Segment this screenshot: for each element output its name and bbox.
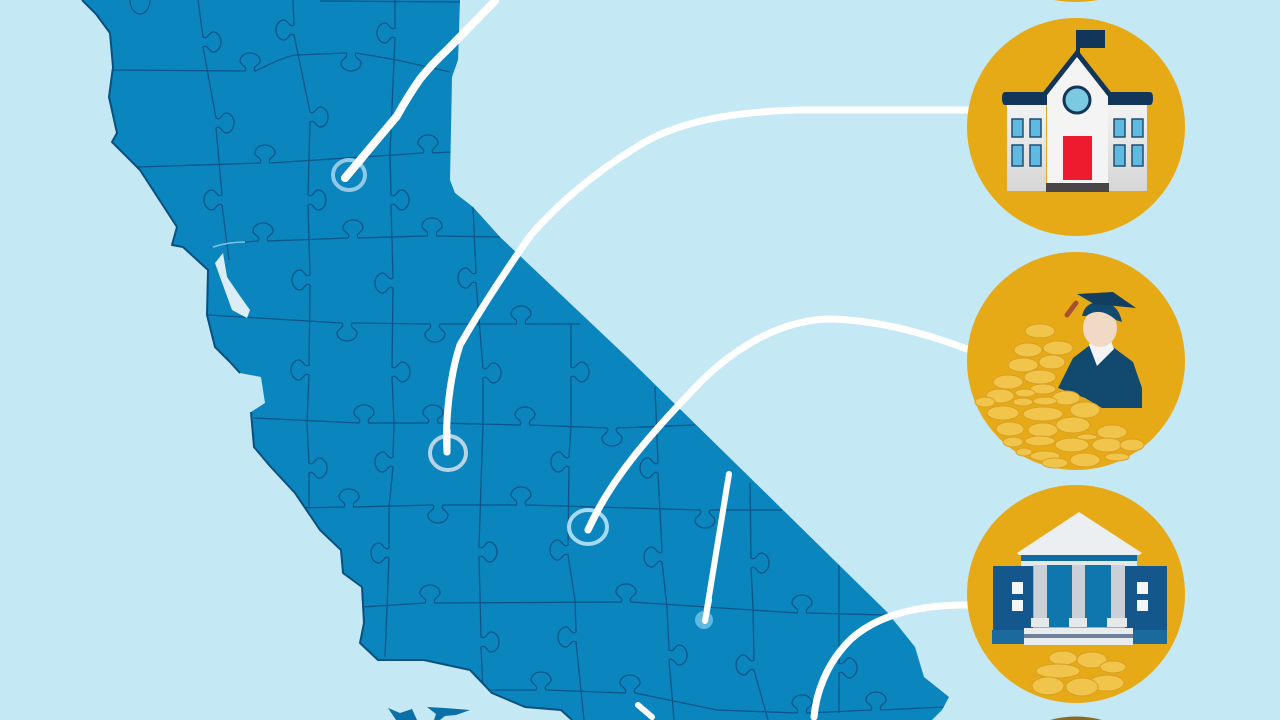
coin pile (975, 324, 1144, 468)
puzzle piece seams (112, 0, 945, 720)
badge (967, 18, 1185, 236)
map: California puzzle (82, 0, 949, 720)
door (1063, 136, 1092, 180)
clock (1064, 87, 1090, 113)
connector lines (345, 1, 968, 717)
wing roofs (1002, 92, 1153, 105)
islands (388, 707, 470, 720)
central gable (1047, 55, 1108, 192)
central wall (1046, 565, 1112, 627)
wings (1007, 105, 1147, 191)
icon: graduate with coins (967, 252, 1185, 470)
icon: bank with coins (967, 485, 1185, 703)
location ring 3 (569, 510, 607, 544)
badge (967, 252, 1185, 470)
flag (1076, 30, 1105, 54)
mortarboard (1077, 292, 1136, 308)
connector 2 (447, 110, 968, 452)
hair (1082, 302, 1122, 322)
icon: partial circle top (1054, 0, 1098, 2)
head (1083, 309, 1117, 347)
icon: school (967, 18, 1185, 236)
coastline outline (82, 0, 572, 720)
connector 5 (814, 605, 967, 717)
windows (1012, 119, 1143, 166)
tassel (1067, 303, 1076, 315)
gable roof (1044, 53, 1110, 95)
frieze (1021, 555, 1137, 561)
connector 4 (705, 474, 729, 621)
collar (1089, 338, 1114, 366)
side wings (993, 566, 1167, 630)
architrave (1021, 561, 1137, 566)
pediment (1017, 512, 1142, 555)
coins (1032, 651, 1126, 696)
location ring 1 (333, 160, 365, 190)
bay inlet highlight (213, 242, 245, 247)
location ring 2 (430, 436, 466, 470)
steps (1046, 183, 1109, 192)
stairs (1024, 628, 1133, 645)
connector 1 (345, 1, 495, 178)
location ring 4 (695, 611, 713, 629)
badge (967, 485, 1185, 703)
column bases (1031, 618, 1127, 627)
connector 6 (638, 705, 652, 717)
wing bases (992, 630, 1167, 644)
line tips redrawn over rings (345, 158, 709, 621)
map silhouette (82, 0, 949, 720)
icon: partial circle bottom (1050, 716, 1102, 720)
columns (1034, 565, 1125, 618)
connector 3 (588, 319, 967, 530)
robe (1058, 345, 1142, 408)
San Francisco bay (215, 253, 250, 318)
stair shadow (1024, 634, 1133, 638)
windows (1012, 582, 1148, 611)
